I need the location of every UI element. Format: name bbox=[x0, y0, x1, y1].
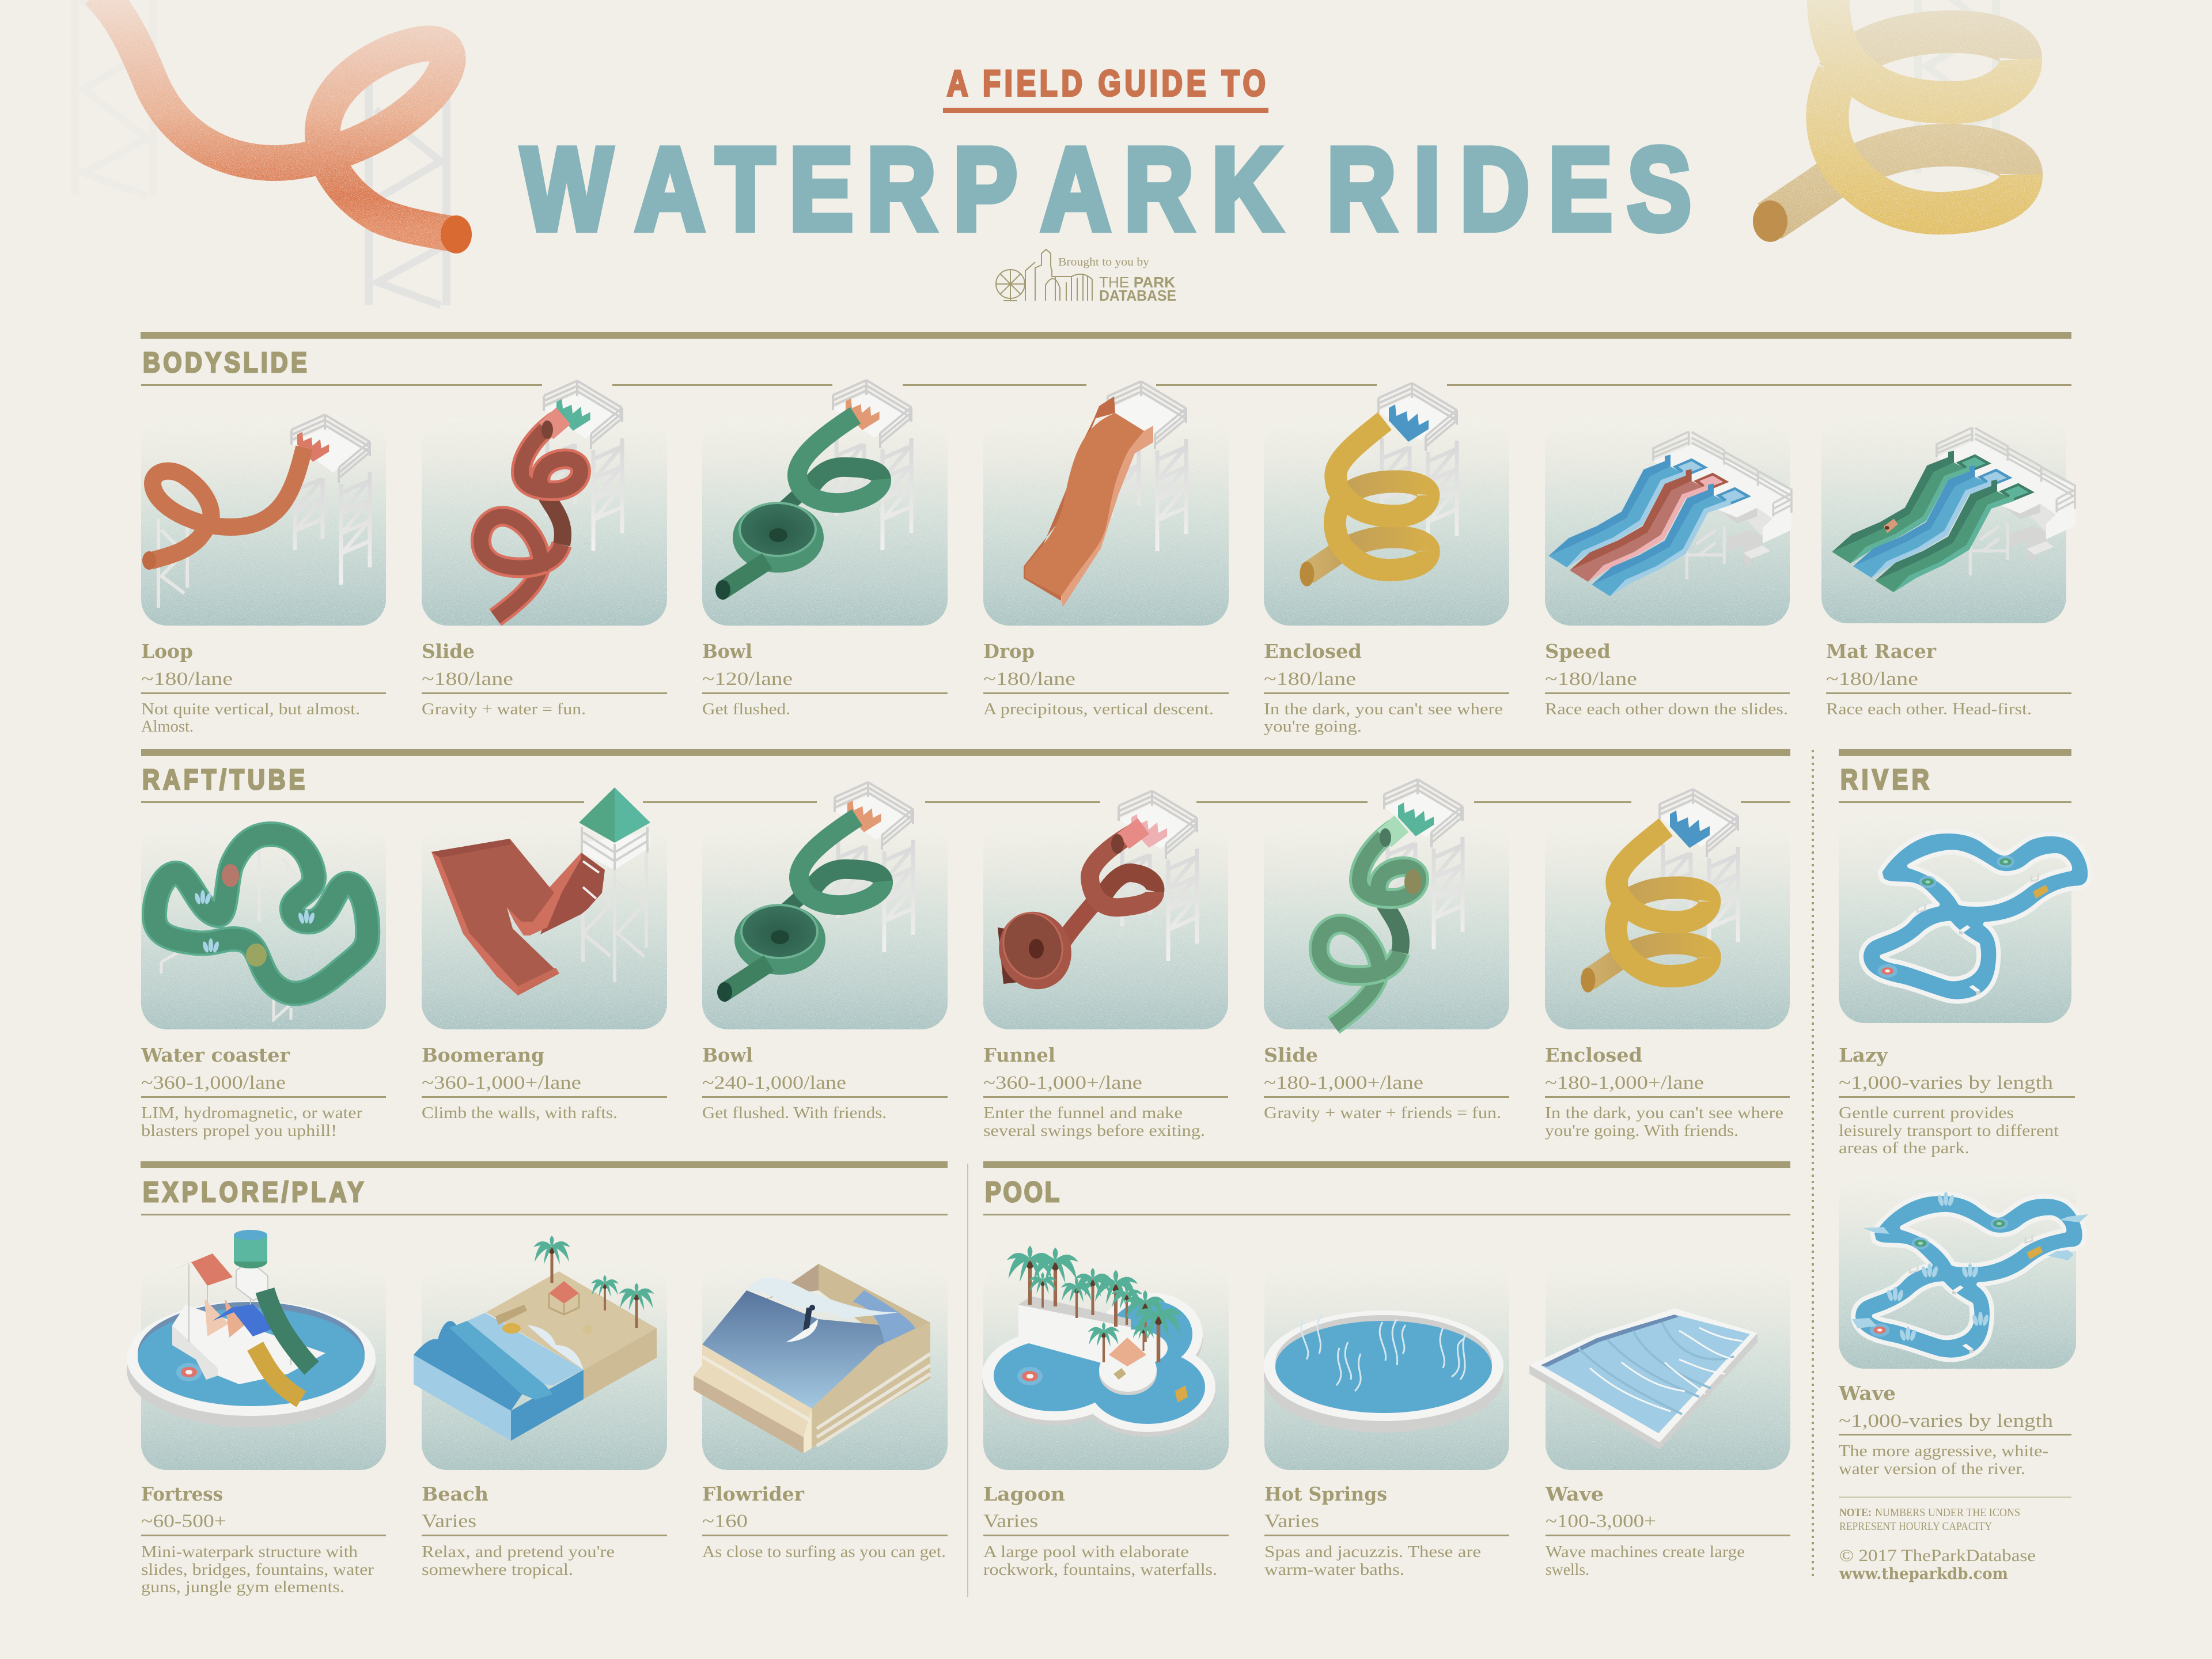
illustration: speed slide bbox=[1548, 431, 1791, 596]
panel: Enclosed bbox=[1264, 383, 1509, 736]
capacity: ~240-1,000/lane bbox=[702, 1073, 846, 1093]
capacity: Varies bbox=[1264, 1511, 1319, 1532]
rule bbox=[983, 1096, 1228, 1098]
panel: Funnel bbox=[983, 791, 1228, 1140]
name: Funnel bbox=[983, 1044, 1055, 1066]
name: Bowl bbox=[702, 1044, 753, 1066]
card bbox=[141, 1263, 386, 1470]
name: Enclosed bbox=[1264, 640, 1362, 662]
card bbox=[1264, 418, 1509, 626]
panel: Flowrider bbox=[694, 1263, 948, 1561]
illustration: enclosed slide bbox=[1300, 383, 1457, 586]
capacity: ~100-3,000+ bbox=[1546, 1511, 1656, 1532]
name: Lagoon bbox=[983, 1483, 1065, 1505]
name: Wave bbox=[1838, 1382, 1896, 1404]
illustration: flowrider bbox=[694, 1264, 930, 1453]
rule bbox=[1545, 692, 1790, 694]
panel: Mat Racer bbox=[1821, 416, 2075, 718]
heading: bodyslide: BODYSLIDE bbox=[143, 347, 307, 378]
panel: Water coaster bbox=[141, 822, 386, 1140]
note: REPRESENT HOURLY CAPACITY bbox=[1839, 1520, 1992, 1533]
capacity: ~180-1,000+/lane bbox=[1545, 1073, 1704, 1093]
card bbox=[422, 418, 667, 626]
card bbox=[702, 1263, 948, 1470]
capacity: ~180/lane bbox=[1826, 669, 1918, 690]
panel: Lagoon bbox=[982, 1245, 1229, 1579]
name: Hot Springs bbox=[1264, 1483, 1387, 1505]
name: Speed bbox=[1545, 640, 1611, 662]
description: blasters propel you uphill! bbox=[141, 1122, 337, 1140]
description: Get flushed. With friends. bbox=[702, 1104, 887, 1122]
panel: Speed bbox=[1545, 418, 1791, 718]
illustration: open slide bbox=[1319, 779, 1463, 1025]
capacity: ~1,000-varies by length bbox=[1839, 1411, 2054, 1431]
card bbox=[1545, 418, 1790, 626]
description: Gentle current provides bbox=[1839, 1104, 2014, 1122]
name: Bowl bbox=[702, 640, 752, 662]
copyright: © 2017 TheParkDatabase bbox=[1839, 1546, 2036, 1565]
logo: The Park Database bbox=[996, 249, 1176, 304]
description: you're going. bbox=[1264, 717, 1362, 736]
name: Wave bbox=[1545, 1483, 1604, 1505]
name: Slide bbox=[422, 640, 475, 662]
card bbox=[1839, 1175, 2076, 1369]
description bbox=[983, 1543, 1217, 1579]
capacity: ~180/lane bbox=[1545, 669, 1637, 690]
description: Almost. bbox=[141, 717, 194, 736]
description bbox=[1839, 1104, 2059, 1157]
name: Slide bbox=[1264, 1044, 1318, 1066]
illustration: open slide bbox=[481, 381, 622, 618]
hero: right yellow coil slide bbox=[1753, 0, 2021, 242]
rule bbox=[1264, 692, 1509, 694]
name: Water coaster bbox=[141, 1044, 290, 1066]
capacity: ~160 bbox=[702, 1511, 748, 1532]
description: leisurely transport to different bbox=[1839, 1122, 2059, 1140]
description: In the dark, you can't see where bbox=[1545, 1104, 1783, 1122]
capacity: ~360-1,000+/lane bbox=[983, 1073, 1142, 1093]
panel: Hot Springs bbox=[1264, 1263, 1509, 1579]
capacity: ~360-1,000+/lane bbox=[422, 1073, 581, 1093]
rule bbox=[1826, 692, 2071, 694]
description: Mini-waterpark structure with bbox=[141, 1543, 358, 1561]
rule bbox=[1264, 1535, 1509, 1536]
description: Spas and jacuzzis. These are bbox=[1264, 1543, 1481, 1561]
hero: left orange loop slide bbox=[75, 0, 472, 305]
description bbox=[141, 700, 360, 736]
panel: Lazy river bbox=[1839, 816, 2090, 1157]
panel: Slide (raft) bbox=[1264, 779, 1509, 1122]
website: www.theparkdb.com bbox=[1839, 1565, 2008, 1583]
description: Wave machines create large bbox=[1546, 1543, 1745, 1561]
note: NUMBERS UNDER THE ICONS bbox=[1875, 1506, 2020, 1519]
card bbox=[983, 822, 1228, 1029]
card bbox=[141, 418, 386, 626]
description: swells. bbox=[1546, 1560, 1589, 1579]
illustration: boomerang bbox=[431, 787, 650, 995]
logo: The Park Database: THE PARK bbox=[1099, 274, 1175, 291]
illustration: beach bbox=[414, 1236, 657, 1441]
description: somewhere tropical. bbox=[422, 1560, 573, 1579]
note bbox=[1839, 1506, 2020, 1533]
capacity: ~60-500+ bbox=[141, 1511, 226, 1532]
name: Enclosed bbox=[1545, 1044, 1642, 1066]
rule bbox=[983, 1535, 1229, 1536]
kicker underline bbox=[943, 108, 1268, 113]
card bbox=[141, 822, 386, 1029]
panel: Wave river bbox=[1838, 1175, 2088, 1478]
description: A precipitous, vertical descent. bbox=[983, 700, 1214, 718]
rule bbox=[702, 1535, 948, 1536]
card bbox=[422, 822, 667, 1029]
panel: Wave pool bbox=[1529, 1263, 1790, 1579]
illustration: loop slide bbox=[142, 415, 370, 608]
panel: Boomerang bbox=[422, 787, 667, 1122]
description: warm-water baths. bbox=[1264, 1560, 1404, 1579]
description: rockwork, fountains, waterfalls. bbox=[983, 1560, 1217, 1579]
rule bbox=[1264, 1096, 1509, 1098]
panel: Beach bbox=[414, 1236, 667, 1579]
name: Boomerang bbox=[422, 1044, 544, 1066]
panel: Enclosed (raft) bbox=[1545, 789, 1790, 1140]
card bbox=[983, 1263, 1229, 1470]
description bbox=[1546, 1543, 1745, 1579]
card bbox=[702, 822, 948, 1029]
rule bbox=[141, 1096, 386, 1098]
capacity: ~180/lane bbox=[983, 669, 1075, 690]
description: slides, bridges, fountains, water bbox=[141, 1560, 374, 1579]
illustration: enclosed slide bbox=[1581, 789, 1738, 993]
card bbox=[702, 418, 948, 626]
heading: pool: POOL bbox=[985, 1176, 1059, 1208]
description: Enter the funnel and make bbox=[983, 1104, 1183, 1122]
logo: The Park Database: DATABASE bbox=[1099, 287, 1176, 304]
description: areas of the park. bbox=[1839, 1139, 1969, 1157]
description bbox=[141, 1543, 374, 1596]
main title: WATERPARK RIDES bbox=[521, 124, 1691, 255]
rule bbox=[1546, 1535, 1790, 1536]
card bbox=[1264, 822, 1509, 1029]
illustration: fortress bbox=[127, 1230, 376, 1427]
illustration: wave pool bbox=[1529, 1308, 1758, 1449]
rule bbox=[141, 1535, 386, 1536]
rule bbox=[422, 1096, 667, 1098]
name: Flowrider bbox=[702, 1483, 805, 1505]
logo mark bbox=[996, 249, 1092, 301]
description: In the dark, you can't see where bbox=[1264, 700, 1503, 718]
description: As close to surfing as you can get. bbox=[702, 1543, 946, 1561]
name: Beach bbox=[422, 1483, 488, 1505]
description: Gravity + water + friends = fun. bbox=[1264, 1104, 1501, 1122]
illustration: bowl slide bbox=[717, 782, 913, 1002]
illustration: hot spring bbox=[1264, 1310, 1503, 1433]
capacity: Varies bbox=[422, 1511, 476, 1532]
panel: Slide bbox=[422, 381, 667, 718]
rule bbox=[702, 1096, 948, 1098]
heading: river: RIVER bbox=[1840, 764, 1929, 796]
illustration: bowl slide bbox=[715, 380, 911, 600]
illustration: lazy river bbox=[1861, 831, 2090, 1002]
description: guns, jungle gym elements. bbox=[141, 1578, 344, 1596]
description: Gravity + water = fun. bbox=[422, 700, 586, 718]
card bbox=[1821, 416, 2066, 623]
panel: Loop bbox=[141, 415, 386, 736]
illustration: drop slide bbox=[1024, 381, 1186, 607]
rule bbox=[422, 692, 667, 694]
rule bbox=[141, 692, 386, 694]
capacity: ~180-1,000+/lane bbox=[1264, 1073, 1423, 1093]
description bbox=[1264, 700, 1503, 736]
card bbox=[1545, 822, 1790, 1029]
illustration: water coaster bbox=[154, 834, 368, 1020]
description: Race each other. Head-first. bbox=[1826, 700, 2032, 718]
description: Get flushed. bbox=[702, 700, 790, 718]
panel: Drop bbox=[983, 381, 1229, 718]
note and credits bbox=[1839, 1497, 2071, 1583]
panel: Fortress bbox=[127, 1230, 386, 1596]
illustration: lagoon bbox=[982, 1245, 1215, 1437]
description: you're going. With friends. bbox=[1545, 1122, 1738, 1140]
description bbox=[1839, 1442, 2048, 1478]
panel: Bowl (raft) bbox=[702, 782, 948, 1122]
capacity: ~180/lane bbox=[422, 669, 513, 690]
section rules bbox=[141, 332, 2071, 1215]
description: several swings before exiting. bbox=[983, 1122, 1205, 1140]
logo text: Brought to you by bbox=[1058, 256, 1149, 268]
description bbox=[1264, 1543, 1481, 1579]
card bbox=[1546, 1263, 1790, 1470]
description: LIM, hydromagnetic, or water bbox=[141, 1104, 362, 1122]
card bbox=[1264, 1263, 1509, 1470]
description: A large pool with elaborate bbox=[983, 1543, 1189, 1561]
capacity: ~180/lane bbox=[1264, 669, 1356, 690]
capacity: ~120/lane bbox=[702, 669, 793, 690]
capacity: Varies bbox=[983, 1511, 1038, 1532]
capacity: ~1,000-varies by length bbox=[1839, 1073, 2054, 1093]
description: Climb the walls, with rafts. bbox=[422, 1104, 618, 1122]
card bbox=[422, 1263, 667, 1470]
illustration: funnel slide bbox=[987, 791, 1197, 1000]
note: NOTE: bbox=[1839, 1506, 1872, 1519]
panel: Bowl bbox=[702, 380, 948, 718]
illustration: mat racer slide bbox=[1832, 427, 2075, 592]
illustration: wave river bbox=[1852, 1192, 2088, 1360]
description: Relax, and pretend you're bbox=[422, 1543, 615, 1561]
rule bbox=[422, 1535, 667, 1536]
description bbox=[422, 1543, 615, 1579]
name: Lazy bbox=[1839, 1044, 1888, 1066]
title block bbox=[521, 63, 1691, 255]
rule bbox=[702, 692, 948, 694]
rule bbox=[1839, 1434, 2071, 1435]
name: Mat Racer bbox=[1826, 640, 1937, 662]
description bbox=[983, 1104, 1205, 1140]
capacity: ~180/lane bbox=[141, 669, 233, 690]
name: Fortress bbox=[141, 1483, 223, 1505]
kicker: a field guide to: A FIELD GUIDE TO bbox=[947, 63, 1266, 104]
card bbox=[983, 418, 1229, 626]
heading: explore/play: EXPLORE/PLAY bbox=[143, 1176, 363, 1208]
card bbox=[1839, 816, 2071, 1023]
rule bbox=[1839, 1096, 2075, 1098]
divider bbox=[1839, 1497, 2071, 1498]
description bbox=[141, 1104, 362, 1140]
description bbox=[1545, 1104, 1783, 1140]
description: Not quite vertical, but almost. bbox=[141, 700, 360, 718]
description: water version of the river. bbox=[1839, 1460, 2025, 1478]
rule bbox=[983, 692, 1229, 694]
capacity: ~360-1,000/lane bbox=[141, 1073, 286, 1093]
description: Race each other down the slides. bbox=[1545, 700, 1788, 718]
description: The more aggressive, white- bbox=[1839, 1442, 2048, 1460]
rule bbox=[1545, 1096, 1790, 1098]
name: Loop bbox=[141, 640, 193, 662]
heading: raft/tube: RAFT/TUBE bbox=[142, 764, 305, 796]
name: Drop bbox=[983, 640, 1035, 662]
